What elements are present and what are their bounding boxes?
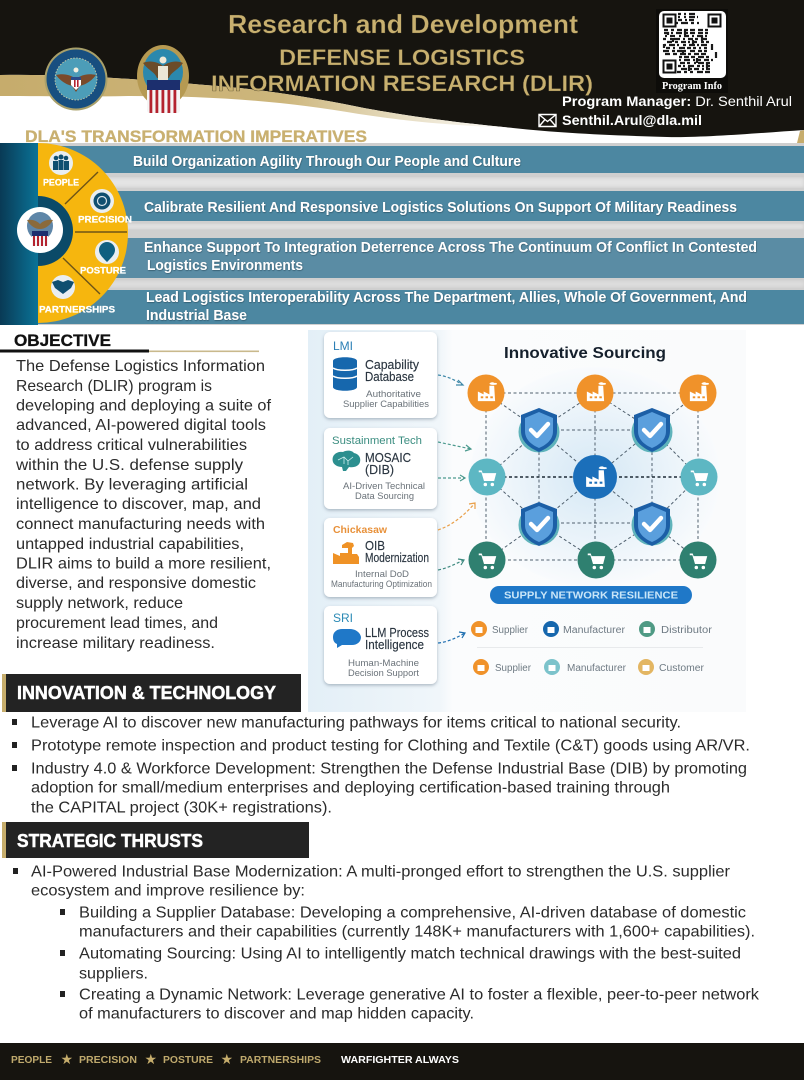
card: SRI LLM process intelligence: Intelligence	[365, 638, 424, 652]
program manager contact: Program Manager: Dr. Senthil Arul	[562, 93, 792, 109]
card: LMI capability database: Database	[365, 370, 414, 384]
card: LMI capability database: LMI	[333, 339, 353, 353]
strategic thrusts bullets: Creating a Dynamic Network: Leverage generative AI to foster a flexible, peer-to-peer network	[79, 986, 760, 1004]
objective text: DLIR aims to build a more resilient,	[16, 556, 271, 572]
card: Sustainment Tech MOSAIC: Sustainment Tech	[332, 435, 422, 447]
objective text: untapped industrial capabilities,	[16, 536, 244, 553]
strategic thrusts bullets: of manufacturers to discover and map hidden capacity.	[79, 1006, 474, 1022]
card: LMI capability database	[324, 332, 437, 418]
imperative bar 3: Logistics Environments	[147, 258, 303, 274]
footer: PARTNERSHIPS	[240, 1054, 321, 1066]
title	[211, 9, 593, 96]
imperative bar 2	[38, 191, 804, 221]
banner: supply network resilience	[490, 586, 692, 604]
objective text: network. By leveraging artificial	[16, 476, 248, 494]
QR code: Program Info	[656, 9, 728, 93]
legend: Manufacturer	[567, 663, 627, 674]
footer: PRECISION	[79, 1054, 137, 1066]
heading: DLA's transformation imperatives: DLA'S TRANSFORMATION IMPERATIVES	[25, 128, 367, 146]
strategic thrusts bullets: suppliers.	[79, 966, 148, 982]
card: Sustainment Tech MOSAIC	[324, 428, 437, 509]
imperative bar 2: Calibrate Resilient And Responsive Logistics Solutions On Support Of Military Readiness	[144, 200, 737, 216]
legend: Supplier	[492, 625, 529, 636]
imperative bar 3	[38, 238, 804, 278]
strategic thrusts bullets: Automating Sourcing: Using AI to intelligently match technical drawings with the best-suited	[79, 946, 741, 962]
innovation and technology bullets	[12, 714, 750, 816]
imperative bar 4: Industrial Base	[146, 308, 247, 324]
objective heading: OBJECTIVE	[14, 332, 111, 350]
card: LMI capability database: Capability	[365, 358, 420, 372]
legend: Manufacturer	[563, 625, 626, 636]
imperative bar 4: Lead Logistics Interoperability Across The Department, Allies, Whole Of Government, And	[146, 290, 747, 306]
legend	[471, 621, 713, 675]
imperative bar 1: Build Organization Agility Through Our People and Culture	[133, 154, 521, 170]
heading: innovation and technology: INNOVATION & TECHNOLOGY	[17, 683, 276, 703]
objective text: The Defense Logistics Information	[16, 358, 265, 375]
card: Chickasaw OIB modernization: Chickasaw	[333, 524, 388, 536]
imperative bar 1	[38, 146, 804, 173]
heading: strategic thrusts	[2, 822, 309, 858]
innovation and technology bullets: Leverage AI to discover new manufacturing pathways for items critical to national security.	[31, 714, 681, 732]
objective text: connect manufacturing needs with	[16, 516, 265, 533]
heading: Innovative Sourcing: Innovative Sourcing	[504, 345, 666, 362]
card: Chickasaw OIB modernization: Internal DoD	[355, 569, 409, 580]
strategic thrusts bullets: manufacturers and their capabilities (currently 148K+ manufacturers with 1,600+ capabilities).	[79, 924, 755, 940]
icon and label: partnerships: PARTNERSHIPS	[39, 304, 115, 316]
card: Chickasaw OIB modernization: Modernization	[365, 551, 429, 565]
left teal strip	[0, 143, 38, 325]
objective text	[15, 358, 272, 652]
strategic thrusts bullets: Building a Supplier Database: Developing a comprehensive, AI-driven database of domestic	[79, 904, 746, 922]
strategic thrusts bullets	[13, 864, 760, 1022]
card: Sustainment Tech MOSAIC: Data Sourcing	[355, 491, 414, 502]
title: Research and Development	[228, 9, 578, 39]
objective text: procurement lead times, and	[16, 615, 218, 632]
objective text: increase military readiness.	[16, 635, 215, 652]
arrows from cards to network	[438, 375, 475, 643]
card: SRI LLM process intelligence: LLM Process	[365, 626, 429, 640]
program manager contact	[539, 93, 792, 128]
icon and label: precision: PRECISION	[78, 214, 132, 226]
supplier nodes	[468, 374, 716, 412]
footer	[0, 1043, 804, 1080]
header background	[0, 0, 804, 145]
heading: innovation and technology	[2, 674, 301, 712]
card: SRI LLM process intelligence: SRI	[333, 611, 353, 625]
icon and label: precision	[78, 189, 132, 226]
objective heading	[0, 332, 259, 352]
objective text: to address critical vulnerabilities	[16, 437, 247, 454]
icon and label: posture: POSTURE	[80, 266, 126, 276]
icon: DLA seal in wheel	[17, 207, 63, 253]
objective text: intelligence to discover, map, and	[16, 496, 261, 513]
icon and label: partnerships	[39, 275, 115, 316]
innovation and technology bullets: the CAPITAL project (30K+ registrations).	[31, 800, 332, 816]
central manufacturer node	[573, 455, 617, 499]
icon: Defense Logistics Agency seal	[137, 45, 189, 113]
footer: ★	[144, 1051, 157, 1067]
card: Sustainment Tech MOSAIC: (DIB)	[365, 463, 394, 477]
heading: strategic thrusts: STRATEGIC THRUSTS	[17, 831, 203, 851]
imperative bar 4	[38, 290, 804, 324]
network connection lines	[486, 393, 699, 560]
card: Chickasaw OIB modernization: Manufacturing Optimization	[331, 579, 432, 590]
card: Chickasaw OIB modernization: OIB	[365, 539, 385, 553]
title: DEFENSE LOGISTICS	[279, 45, 525, 70]
icon and label: posture	[80, 240, 126, 276]
icon and label: people: PEOPLE	[43, 178, 79, 188]
footer: WARFIGHTER ALWAYS	[341, 1054, 459, 1066]
objective text: within the U.S. defense supply	[15, 457, 243, 474]
footer: ★	[220, 1051, 233, 1067]
strategic thrusts bullets: AI-Powered Industrial Base Modernization: A multi-pronged effort to strengthen the U.S. supplier	[31, 864, 731, 880]
title: INFORMATION RESEARCH (DLIR)	[211, 71, 593, 96]
shield nodes	[518, 408, 672, 546]
program manager contact: Senthil.Arul@dla.mil	[562, 112, 702, 128]
icon and label: people	[43, 151, 79, 188]
customer nodes	[468, 458, 718, 578]
card: LMI capability database: Supplier Capabilities	[343, 399, 429, 410]
innovation and technology bullets: Prototype remote inspection and product testing for Clothing and Textile (C&T) goods using AR/VR.	[31, 738, 750, 754]
footer: POSTURE	[163, 1054, 213, 1066]
legend: Customer	[659, 663, 705, 674]
legend: Distributor	[661, 625, 713, 636]
card: LMI capability database: Authoritative	[366, 389, 421, 400]
panel: innovative sourcing diagram	[308, 330, 746, 712]
card: SRI LLM process intelligence: Human-Machine	[348, 658, 419, 669]
card: Chickasaw OIB modernization	[324, 518, 437, 597]
QR code: Program Info: Program Info	[662, 81, 722, 92]
objective text: advanced, AI-powered digital tools	[16, 417, 266, 434]
footer: ★	[60, 1051, 73, 1067]
imperative bar 3: Enhance Support To Integration Deterrence Across The Continuum Of Conflict In Contested	[144, 240, 757, 256]
innovation and technology bullets: Industry 4.0 & Workforce Development: Strengthen the Defense Industrial Base (DIB) by promoting	[31, 760, 747, 778]
panel: imperatives	[0, 143, 804, 325]
card: Sustainment Tech MOSAIC: MOSAIC	[365, 451, 411, 465]
legend: Supplier	[495, 663, 532, 674]
innovation and technology bullets: adoption for small/medium enterprises and deploying certification-based training through	[31, 780, 670, 796]
footer: PEOPLE	[11, 1054, 52, 1066]
yellow wheel	[38, 143, 128, 323]
objective text: Research (DLIR) program is	[16, 378, 212, 395]
objective text: supply network, reduce	[16, 595, 183, 612]
card: Sustainment Tech MOSAIC: AI-Driven Technical	[343, 481, 425, 492]
banner: supply network resilience: SUPPLY NETWORK RESILIENCE	[504, 590, 678, 602]
icon: Department of Defense seal	[44, 48, 108, 110]
objective text: developing and deploying a suite of	[16, 398, 272, 414]
objective text: diverse, and responsive domestic	[16, 575, 256, 592]
strategic thrusts bullets: ecosystem and improve resilience by:	[31, 882, 305, 900]
card: SRI LLM process intelligence	[324, 606, 437, 684]
card: SRI LLM process intelligence: Decision Support	[348, 668, 419, 679]
